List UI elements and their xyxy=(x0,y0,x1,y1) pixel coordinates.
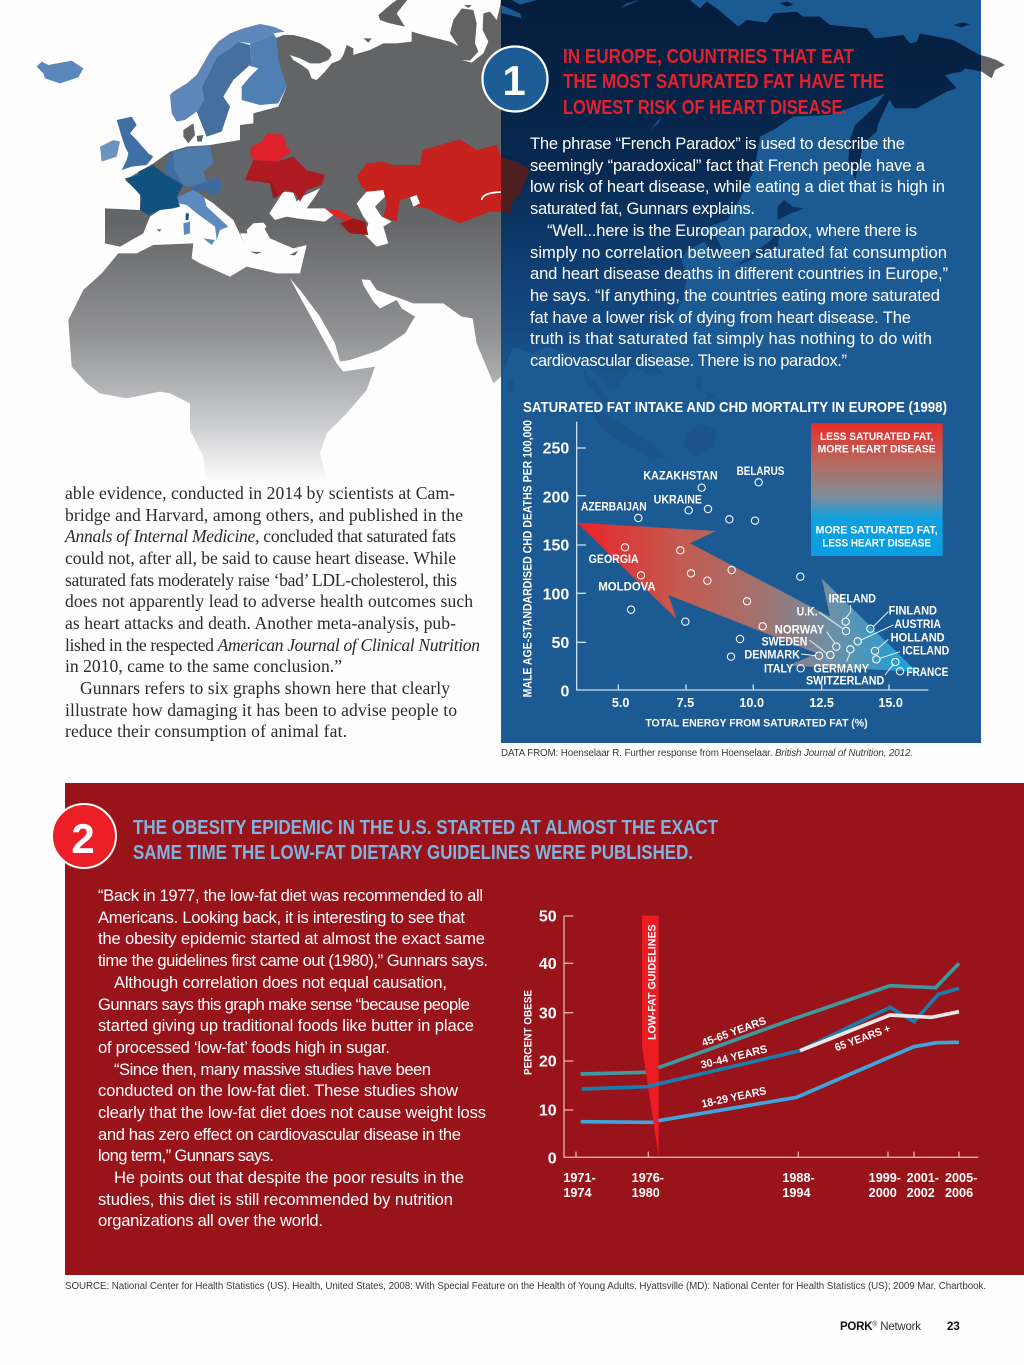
text block: low-fat diet and obesity: Americans. Looking back, it is interesting to see that xyxy=(98,908,465,927)
text block: low-fat diet and obesity: started giving up traditional foods like butter in place xyxy=(98,1016,474,1035)
text block: left column article: Gunnars refers to six graphs shown here that clearly xyxy=(80,678,450,698)
text block: low-fat diet and obesity: “Since then, many massive studies have been xyxy=(114,1060,431,1079)
text block: left column article: as heart attacks and death. Another meta-analysis, pub- xyxy=(65,613,456,633)
y axis numbers: 0 xyxy=(560,684,569,701)
x axis period labels: 2000 xyxy=(869,1186,897,1200)
text block: French paradox explanation: truth is that saturated fat simply has nothing to do with xyxy=(530,329,932,348)
country labels: ICELAND xyxy=(902,645,949,658)
x axis period labels: 2005- xyxy=(945,1171,977,1185)
country labels: SWITZERLAND xyxy=(806,674,884,687)
y axis numbers: 50 xyxy=(539,908,557,925)
heading: Europe finding: IN EUROPE, COUNTRIES THAT EAT xyxy=(563,46,854,68)
x axis period labels: 1999- xyxy=(869,1171,901,1185)
text block: French paradox explanation: low risk of heart disease, while eating a diet that is high in xyxy=(530,177,945,196)
text block: low-fat diet and obesity: long term,” Gunnars says. xyxy=(98,1146,274,1165)
text block: French paradox explanation: cardiovascular disease. There is no paradox.” xyxy=(530,351,847,370)
text block: low-fat diet and obesity: organizations all over the world. xyxy=(98,1211,323,1230)
x axis period labels: 1971- xyxy=(563,1171,596,1185)
line: 18-29 years xyxy=(658,1042,959,1121)
text block: left column article: could not, after all, be said to cause heart disease. While xyxy=(65,548,456,568)
text block: French paradox explanation: simply no correlation between saturated fat consumption xyxy=(530,243,947,262)
heading: obesity epidemic: SAME TIME THE LOW-FAT DIETARY GUIDELINES WERE PUBLISHED. xyxy=(133,842,693,864)
y axis numbers: 20 xyxy=(539,1054,557,1071)
text block: low-fat diet and obesity: and has zero effect on cardiovascular disease in the xyxy=(98,1125,461,1144)
text block: low-fat diet and obesity: the obesity epidemic started at almost the exact same xyxy=(98,929,485,948)
heading: obesity epidemic: THE OBESITY EPIDEMIC IN THE U.S. STARTED AT ALMOST THE EXACT xyxy=(133,817,718,839)
country labels: AZERBAIJAN xyxy=(581,501,647,514)
text block: left column article xyxy=(64,483,480,741)
legend box xyxy=(811,423,943,556)
line labels: 65 YEARS + xyxy=(833,1023,892,1054)
axes xyxy=(577,422,928,690)
y axis numbers: 50 xyxy=(552,635,569,652)
text block: French paradox explanation: The phrase “French Paradox” is used to describe the xyxy=(530,134,905,153)
legend box: LESS HEART DISEASE xyxy=(822,537,931,549)
x axis numbers: 5.0 xyxy=(612,696,629,710)
y axis numbers: 10 xyxy=(539,1103,557,1120)
footer: magazine name: Network xyxy=(877,1321,921,1333)
text block: low-fat diet and obesity: conducted on the low-fat diet. These studies show xyxy=(98,1081,459,1100)
y axis numbers xyxy=(543,440,569,701)
country labels: NORWAY xyxy=(775,623,825,636)
x axis title: TOTAL ENERGY FROM SATURATED FAT (%) xyxy=(645,717,868,729)
text block: French paradox explanation xyxy=(530,134,948,370)
y axis numbers: 150 xyxy=(543,538,569,555)
text block: French paradox explanation: he says. “If anything, the countries eating more saturated xyxy=(530,286,940,305)
text block: low-fat diet and obesity: Although correlation does not equal causation, xyxy=(114,973,447,992)
scatter chart: fat intake vs mortality xyxy=(522,420,949,729)
text block: left column article: Annals of Internal Medicine, concluded that saturated fats xyxy=(64,526,456,546)
line labels: 18-29 YEARS xyxy=(700,1085,768,1111)
country labels: FINLAND xyxy=(889,604,937,617)
text block: French paradox explanation: “Well...here is the European paradox, where there is xyxy=(547,221,917,240)
line chart: percent obese by age group xyxy=(523,908,978,1200)
panel: obesity epidemic red background xyxy=(65,783,1024,1275)
x axis period labels: 1974 xyxy=(563,1186,591,1200)
x axis period labels xyxy=(563,1171,977,1200)
country labels: DENMARK xyxy=(744,648,801,661)
heading: Europe finding xyxy=(563,46,884,119)
x axis numbers xyxy=(612,696,903,710)
x axis numbers: 10.0 xyxy=(739,696,764,710)
low-fat guidelines marker xyxy=(642,916,659,1157)
text block: French paradox explanation: saturated fat, Gunnars explains. xyxy=(530,199,755,218)
country labels: KAZAKHSTAN xyxy=(643,469,718,482)
country labels: HOLLAND xyxy=(891,631,945,644)
y axis numbers: 0 xyxy=(548,1150,557,1167)
line labels: 45-65 YEARS xyxy=(700,1015,768,1049)
marker label: LOW-FAT GUIDELINES xyxy=(647,924,659,1040)
heading: Europe finding: LOWEST RISK OF HEART DISEASE. xyxy=(563,97,847,119)
text block: low-fat diet and obesity: Gunnars says this graph make sense “because people xyxy=(98,995,470,1014)
country labels: AUSTRIA xyxy=(894,618,942,631)
footer: magazine name: PORK xyxy=(840,1321,873,1333)
text block: French paradox explanation: and heart disease deaths in different countries in Europe,” xyxy=(530,264,948,283)
x axis numbers: 12.5 xyxy=(809,696,834,710)
text block: low-fat diet and obesity: He points out that despite the poor results in the xyxy=(114,1168,464,1187)
line labels: 30-44 YEARS xyxy=(699,1043,769,1072)
y axis numbers: 30 xyxy=(539,1005,557,1022)
y axis numbers: 100 xyxy=(543,587,569,604)
text block: low-fat diet and obesity: studies, this diet is still recommended by nutrition xyxy=(98,1190,453,1209)
panel: European paradox blue background xyxy=(501,0,981,743)
double arrow xyxy=(577,523,917,672)
badge: number 2: 2 xyxy=(71,815,95,862)
y axis numbers xyxy=(539,908,557,1167)
badge: number 1: 1 xyxy=(502,57,526,104)
text block: left column article: able evidence, conducted in 2014 by scientists at Cam- xyxy=(65,483,455,503)
x axis period labels: 2001- xyxy=(907,1171,939,1185)
country labels: UKRAINE xyxy=(654,494,702,507)
text block: left column article: in 2010, came to the same conclusion.” xyxy=(65,656,342,676)
text block: low-fat diet and obesity xyxy=(98,886,488,1230)
x axis period labels: 1994 xyxy=(782,1186,810,1200)
text block: left column article: illustrate how damaging it has been to advise people to xyxy=(65,700,457,720)
line: 45-65 years, left xyxy=(581,1072,646,1074)
line: 45-65 years xyxy=(658,963,959,1068)
country labels: BELARUS xyxy=(737,465,785,478)
x axis numbers: 15.0 xyxy=(878,696,903,710)
line: 65 years and over xyxy=(800,1012,959,1051)
legend box: MORE SATURATED FAT, xyxy=(816,525,938,537)
text block: French paradox explanation: seemingly “paradoxical” fact that French people have a xyxy=(530,156,926,175)
legend box: LESS SATURATED FAT, xyxy=(820,431,933,443)
text block: left column article: does not apparently lead to adverse health outcomes such xyxy=(65,591,473,611)
source note: SOURCE: National Center for Health Statistics (US). Health, United States, 2008: With Special Feature on the Health of Young Adults. Hyattsville (MD): National Center for Health Statistics (US); 2009 Mar. Chartbook. xyxy=(65,1281,986,1292)
country labels: GERMANY xyxy=(813,662,869,675)
text block: left column article: saturated fats moderately raise ‘bad’ LDL-cholesterol, this xyxy=(65,570,457,590)
country labels: GEORGIA xyxy=(589,553,639,566)
badge: number 2 xyxy=(52,804,116,868)
x axis numbers: 7.5 xyxy=(677,696,694,710)
text block: left column article: reduce their consumption of animal fat. xyxy=(65,721,347,741)
line: 18-29 years, left xyxy=(581,1116,653,1128)
heading: obesity epidemic xyxy=(133,817,718,864)
leader lines xyxy=(801,605,900,675)
data source note: DATA FROM: Hoenselaar R. Further response from Hoenselaar. British Journal of Nutrition, 2012. xyxy=(501,748,913,759)
country labels: U.K. xyxy=(797,606,818,619)
text block: French paradox explanation: fat have a lower risk of dying from heart disease. The xyxy=(530,308,911,327)
text block: low-fat diet and obesity: “Back in 1977, the low-fat diet was recommended to all xyxy=(98,886,483,905)
footer: page number: 23 xyxy=(947,1321,960,1333)
line labels xyxy=(699,1015,892,1111)
axes xyxy=(564,916,978,1157)
legend box: MORE HEART DISEASE xyxy=(818,444,936,456)
text block: low-fat diet and obesity: time the guidelines first came out (1980),” Gunnars says. xyxy=(98,951,488,970)
chart title: saturated fat and CHD: SATURATED FAT INTAKE AND CHD MORTALITY IN EUROPE (1998) xyxy=(523,399,947,416)
x axis period labels: 1980 xyxy=(632,1186,660,1200)
footer: magazine name: ® xyxy=(872,1320,878,1328)
x axis period labels: 2002 xyxy=(907,1186,935,1200)
y axis numbers: 40 xyxy=(539,956,557,973)
country labels xyxy=(581,465,949,687)
country labels: SWEDEN xyxy=(762,636,807,649)
x axis period labels: 2006 xyxy=(945,1186,973,1200)
text block: left column article: lished in the respected American Journal of Clinical Nutrition xyxy=(65,635,480,655)
y axis numbers: 250 xyxy=(543,440,569,457)
y axis title: MALE AGE-STANDARDISED CHD DEATHS PER 100,000 xyxy=(522,420,535,697)
text block: low-fat diet and obesity: clearly that the low-fat diet does not cause weight loss xyxy=(98,1103,486,1122)
country labels: IRELAND xyxy=(829,593,876,606)
x axis period labels: 1988- xyxy=(782,1171,815,1185)
map: Europe, Asia and Africa with highlighted countries xyxy=(37,0,1005,480)
y axis title: PERCENT OBESE xyxy=(523,990,535,1075)
data points xyxy=(621,479,904,675)
text block: left column article: bridge and Harvard, among others, and published in the xyxy=(65,505,463,525)
heading: Europe finding: THE MOST SATURATED FAT HAVE THE xyxy=(563,71,884,93)
x axis period labels: 1976- xyxy=(632,1171,664,1185)
country labels: FRANCE xyxy=(906,666,949,679)
badge: number 1 xyxy=(482,46,548,112)
country labels: MOLDOVA xyxy=(598,581,656,594)
country labels: ITALY xyxy=(764,663,794,676)
line: 30-44 years xyxy=(582,988,959,1089)
y axis numbers: 200 xyxy=(543,489,569,506)
text block: low-fat diet and obesity: of processed ‘low-fat’ foods high in sugar. xyxy=(98,1038,390,1057)
